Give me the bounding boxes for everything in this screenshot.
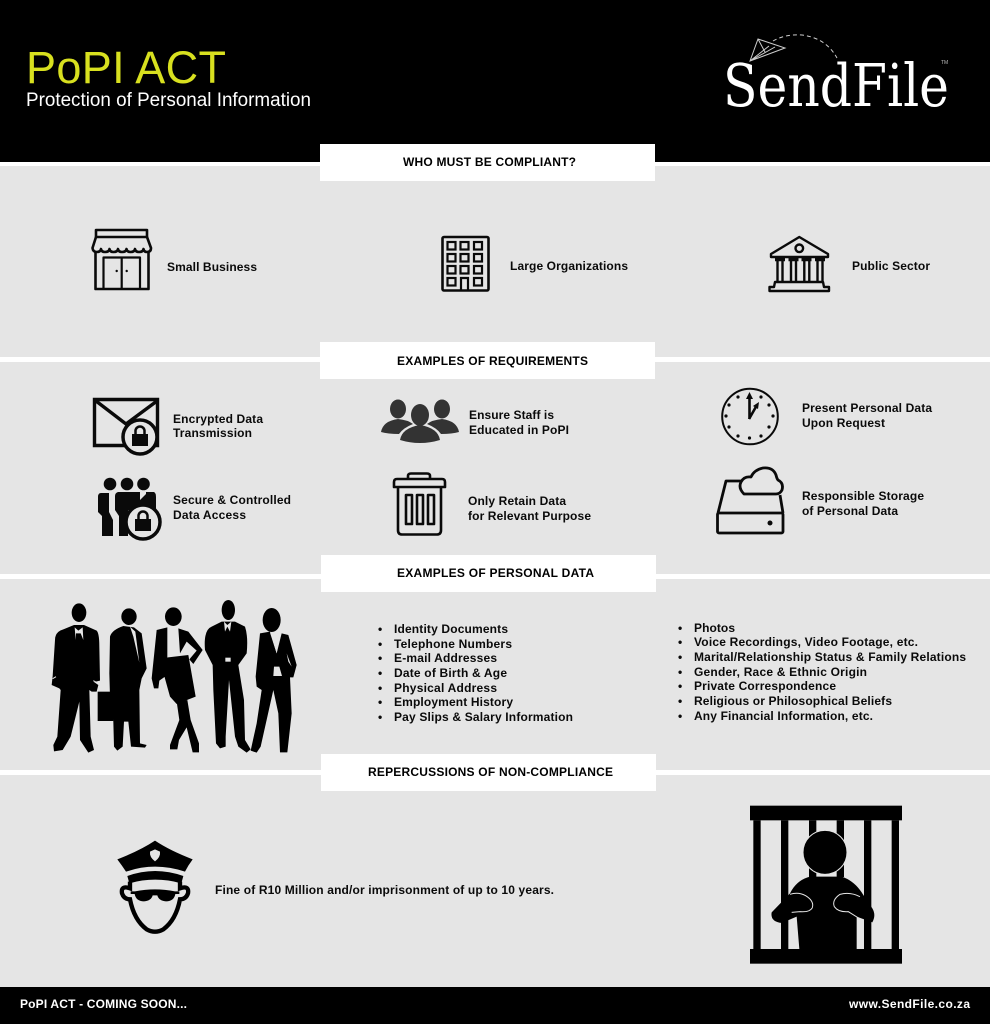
logo: SendFile: SendFile [723,51,949,120]
label: encrypted data transmission [173,412,263,440]
heading box: who must be compliant: WHO MUST BE COMPLIANT? [403,155,576,169]
list: personal data column one: Identity Documents [394,622,508,636]
label: public sector: Public Sector [852,259,930,273]
label: present personal data: Present Personal Data [802,401,932,415]
list: personal data column two: Voice Recordings, Video Footage, etc. [694,635,918,649]
illustration: business people silhouettes [52,600,297,753]
icon: small business storefront [92,230,151,289]
panel: repercussions [0,775,990,987]
label: only retain data: for Relevant Purpose [468,509,591,523]
label: large organizations: Large Organizations [510,259,628,273]
label: present personal data [802,401,932,430]
list: personal data column one: • [378,637,382,651]
footer band [0,987,990,1024]
label: responsible storage: Responsible Storage [802,489,924,503]
label: encrypted data transmission: Transmission [173,426,252,440]
list: personal data column two: • [678,621,682,635]
heading box: repercussions of non-compliance [321,754,656,791]
label: ensure staff is educated [469,408,569,437]
list: personal data column two: Any Financial Information, etc. [694,709,873,723]
icon: cloud storage drive [718,468,783,533]
subtitle: Protection of Personal Information [26,90,311,111]
label: only retain data [468,494,591,523]
icon: public sector bank [770,237,829,291]
list: personal data column one: Date of Birth & Age [394,666,507,680]
list: personal data column one: • [378,695,382,709]
list: personal data column two [678,621,966,723]
label: secure and controlled access: Data Access [173,508,246,522]
logo: SendFile: TM [941,60,948,66]
label: ensure staff is educated: Ensure Staff is [469,408,554,422]
label: small business: Small Business [167,260,257,274]
panel: examples of requirements [0,362,990,574]
panel: who must be compliant [0,166,990,357]
icon: trash can [394,474,445,534]
icon: prisoner behind bars [750,806,902,964]
list: personal data column two: Private Correspondence [694,679,836,693]
list: personal data column one: Pay Slips & Salary Information [394,710,573,724]
icon: staff group [381,400,459,443]
list: personal data column two: Photos [694,621,735,635]
label: only retain data: Only Retain Data [468,494,566,508]
label: secure and controlled access: Secure & Controlled [173,493,291,507]
list: personal data column one: • [378,622,382,636]
footer left text: PoPI ACT - COMING SOON... [20,997,187,1011]
label: responsible storage: of Personal Data [802,504,898,518]
list: personal data column two: Religious or Philosophical Beliefs [694,694,892,708]
list: personal data column one: • [378,666,382,680]
list: personal data column one [378,622,573,724]
heading box: examples of personal data: EXAMPLES OF PERSONAL DATA [397,566,594,580]
heading box: repercussions of non-compliance: REPERCUSSIONS OF NON-COMPLIANCE [368,765,613,779]
header band [0,0,990,162]
list: personal data column two: • [678,650,682,664]
panel: examples of personal data [0,579,990,770]
list: personal data column one: Employment History [394,695,513,709]
fine text: Fine of R10 Million and/or imprisonment of up to 10 years. [215,883,554,897]
label: present personal data: Upon Request [802,416,885,430]
heading box: examples of personal data [321,555,656,592]
label: ensure staff is educated: Educated in PoPI [469,423,569,437]
icon: secure data access [98,478,160,539]
list: personal data column two: • [678,635,682,649]
list: personal data column one: Telephone Numbers [394,637,512,651]
icon: police officer [117,841,193,932]
list: personal data column one: Physical Address [394,681,497,695]
footer website: www.SendFile.co.za [848,997,970,1011]
heading box: who must be compliant [320,144,655,181]
list: personal data column two: • [678,709,682,723]
icon: encrypted envelope [94,400,158,454]
heading box: examples of requirements [320,342,655,379]
icon: clock [722,389,778,444]
icon: large organization building [442,237,488,290]
list: personal data column one: • [378,710,382,724]
list: personal data column two: • [678,694,682,708]
list: personal data column two: • [678,679,682,693]
list: personal data column one: • [378,681,382,695]
label: responsible storage [802,489,924,518]
title: PoPI ACT [26,42,226,93]
list: personal data column one: • [378,651,382,665]
list: personal data column two: • [678,665,682,679]
label: secure and controlled access [173,493,291,522]
list: personal data column two: Marital/Relationship Status & Family Relations [694,650,966,664]
list: personal data column one: E-mail Addresses [394,651,497,665]
heading box: examples of requirements: EXAMPLES OF REQUIREMENTS [397,354,588,368]
label: encrypted data transmission: Encrypted Data [173,412,263,426]
list: personal data column two: Gender, Race & Ethnic Origin [694,665,867,679]
